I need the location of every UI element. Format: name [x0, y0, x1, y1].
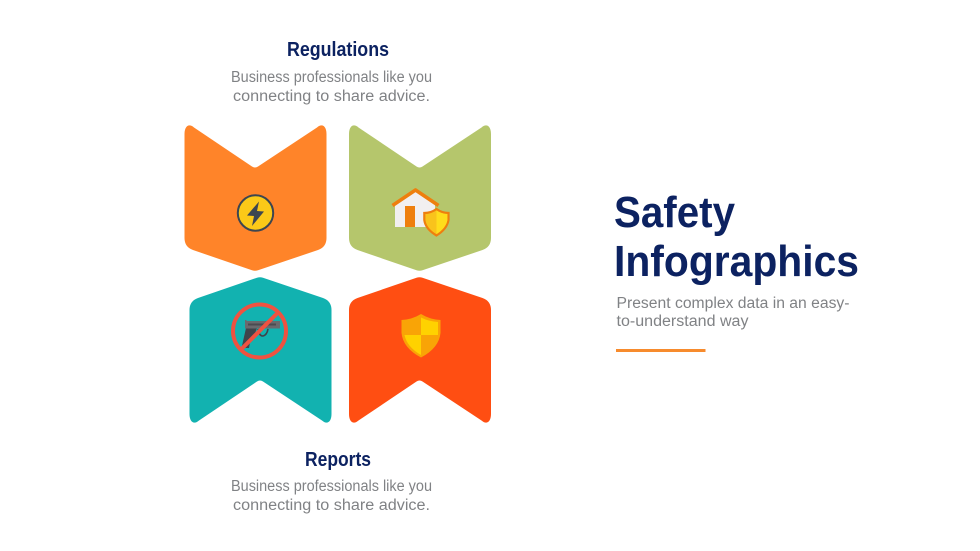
icon: quartered shield	[402, 314, 440, 358]
bottom text block: Reports	[231, 449, 432, 514]
accent underline	[616, 349, 706, 352]
heading: Reports: Reports	[305, 449, 371, 471]
title: Safety Infographics: Safety	[614, 188, 735, 237]
title: Safety Infographics	[614, 188, 859, 286]
description: Reports	[231, 478, 432, 514]
description: Regulations: Business professionals like you	[231, 69, 432, 86]
panel: green chevron with house icon	[349, 125, 491, 271]
panel: teal chevron with no-gun icon	[190, 277, 332, 423]
description: Reports: connecting to share advice.	[233, 497, 430, 514]
top text block: Regulations	[231, 39, 432, 105]
description: Reports: Business professionals like you	[231, 478, 432, 495]
title: Safety Infographics: Infographics	[614, 237, 859, 286]
icon: lightning bolt	[238, 195, 273, 231]
icon: prohibited handgun	[233, 304, 286, 358]
subtitle	[616, 295, 850, 330]
icon: house with shield	[392, 190, 448, 236]
description: Regulations	[231, 69, 432, 105]
title block	[614, 188, 859, 352]
panel: red-orange chevron with shield icon	[349, 277, 491, 423]
subtitle: Present complex data in an easy-	[616, 295, 850, 312]
subtitle: to-understand way	[616, 313, 749, 330]
heading: Regulations: Regulations	[287, 39, 389, 61]
panel: orange chevron with lightning icon	[184, 125, 326, 271]
description: Regulations: connecting to share advice.	[233, 88, 430, 105]
